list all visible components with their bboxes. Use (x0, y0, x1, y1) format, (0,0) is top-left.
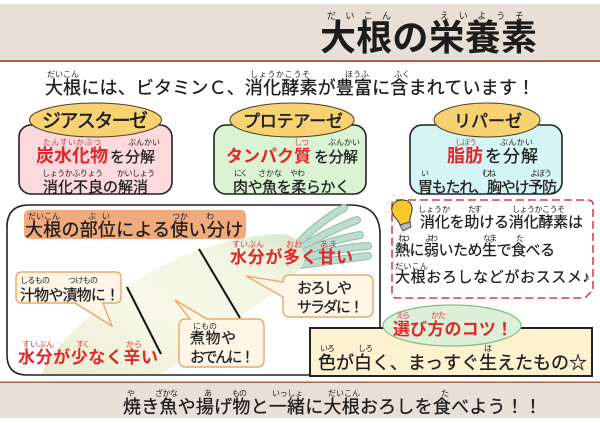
panel: リパーゼ: むね (482, 169, 496, 178)
panel: ジアスターゼ: ジアスターゼ (42, 110, 148, 132)
text: tip lines: よわ (425, 234, 438, 243)
panel: how to choose: いろ (320, 344, 335, 353)
panel: リパーゼ: リパーゼ (454, 112, 522, 131)
title: えいようそ (440, 11, 524, 21)
text: tip lines: ねつ (398, 234, 410, 243)
panel: プロテアーゼ: やわ (290, 169, 305, 178)
panel: ジアスターゼ: を分解 (110, 149, 155, 166)
text: tip lines: た (516, 234, 524, 243)
panel: how to choose (310, 305, 592, 376)
callout: soups and pickles: つけもの (68, 276, 98, 285)
panel: how to choose: 選び方のコツ！ (393, 319, 513, 339)
intro sentence: ほうふ (345, 70, 369, 79)
intro sentence: 大根には、ビタミンＣ、消化酵素が豊富に含まれています！ (45, 78, 535, 98)
intro sentence: ふく (394, 70, 410, 79)
heading: parts (24, 210, 246, 240)
heading: parts: だいこん (28, 212, 60, 221)
label: less water and spicy: すいぶん (22, 340, 54, 349)
callout: simmered dishes (175, 300, 264, 367)
text: tip lines: 消化を助ける消化酵素は (420, 214, 583, 231)
footer message: いっしょ (272, 389, 303, 398)
text: tip lines: しょうか (418, 205, 450, 214)
panel: プロテアーゼ: しつ (294, 138, 309, 147)
panel: プロテアーゼ: タンパク質 (226, 147, 311, 166)
panel: ジアスターゼ (19, 103, 172, 196)
callout: simmered dishes: にもの (193, 322, 217, 331)
callout: simmered dishes: おでんに！ (190, 349, 255, 366)
callout: grated and salad: おろしや (297, 280, 352, 297)
title: だいこん (327, 11, 391, 21)
panel: ジアスターゼ: 炭水化物 (36, 146, 108, 166)
panel: ジアスターゼ: ぶんかい (128, 138, 160, 147)
header band (0, 4, 600, 62)
intro sentence: だいこん (47, 70, 79, 79)
callout: grated and salad (246, 275, 373, 317)
panel: リパーゼ: しぼう (455, 138, 477, 147)
panel: parts of the daikon (7, 205, 380, 375)
footer message: ざかな (155, 388, 178, 398)
intro sentence: しょうかこうそ (250, 70, 310, 79)
callout: grated and salad: サラダに！ (297, 299, 364, 316)
label: more water and sweet: すいぶん (232, 240, 264, 249)
panel: how to choose: は (484, 344, 492, 353)
callout: simmered dishes: 煮物や (190, 330, 236, 347)
footer message: 焼き魚や揚げ物と一緒に大根おろしを食べよう！！ (123, 397, 542, 417)
panel: リパーゼ: ぶんかい (500, 138, 533, 147)
divider lines (127, 249, 240, 354)
text: tip lines: 熱に弱いため生で食べる (395, 242, 555, 259)
panel: ジアスターゼ: 消化不良の解消 (43, 179, 148, 196)
footer message: や (127, 389, 135, 398)
callout: soups and pickles: しるもの (20, 276, 50, 285)
panel: プロテアーゼ: 肉や魚を柔らかく (233, 179, 350, 196)
label: less water and spicy: から (126, 340, 142, 349)
panel: リパーゼ: よぼう (530, 169, 552, 178)
illustration: daikon (42, 208, 368, 374)
footer message: だいこん (328, 389, 360, 398)
panel: リパーゼ: 胃もたれ、胸やけ予防 (418, 179, 557, 196)
heading: parts: 大根の部位による使い分け (25, 220, 243, 240)
panel: ジアスターゼ: しょうかふりょう (42, 169, 103, 178)
footer message: た (441, 389, 449, 398)
footer message: もの (232, 389, 247, 398)
heading: parts: ぶ い (88, 212, 110, 221)
text: tip lines: たす (468, 205, 482, 214)
panel: リパーゼ (410, 103, 562, 196)
text: tip lines: なま (483, 234, 497, 243)
panel: how to choose: しろ (358, 344, 373, 353)
footer message (123, 388, 542, 417)
label: less water and spicy: 水分が少なく辛い (18, 347, 158, 367)
text: tip lines: 大根おろしなどがおススメ♪ (395, 269, 590, 286)
panel: ジアスターゼ: たんすいかぶつ (43, 138, 101, 147)
panel: how to choose: えら (396, 311, 410, 320)
text: tip lines: だいこん (395, 262, 428, 271)
panel: how to choose: かた (431, 311, 446, 320)
callout: soups and pickles: 汁物や漬物に！ (20, 287, 120, 304)
callout: soups and pickles (16, 272, 121, 326)
panel: プロテアーゼ: プロテアーゼ (243, 112, 343, 131)
panel: digestive enzyme tip (385, 192, 593, 298)
footer band (0, 382, 600, 418)
text: tip lines (395, 205, 590, 286)
panel: プロテアーゼ (214, 103, 366, 196)
label: more water and sweet: おお (286, 240, 302, 249)
panel: ジアスターゼ: かいしょう (117, 169, 155, 178)
panel: プロテアーゼ: にく (234, 169, 248, 178)
heading: parts: わ (206, 212, 214, 221)
icon: light bulb (385, 192, 412, 231)
panel: リパーゼ: 脂肪 (447, 146, 483, 166)
label: less water and spicy: すく (76, 340, 90, 349)
panel: how to choose: 色が白く、まっすぐ生えたもの☆ (318, 353, 587, 373)
panel: プロテアーゼ: を分解 (314, 149, 358, 166)
heading: parts: つか (172, 212, 188, 221)
title: 大根の栄養素 (320, 17, 537, 58)
panel: リパーゼ: い (421, 169, 429, 178)
footer message: あ (204, 389, 212, 398)
panel: プロテアーゼ: さかな (258, 169, 282, 178)
label: more water and sweet: あま (320, 240, 337, 249)
panel: リパーゼ: を分解 (485, 147, 538, 166)
panel: プロテアーゼ: ぶんかい (328, 138, 360, 147)
text: tip lines: しょうかこうそ (512, 205, 565, 214)
label: more water and sweet: 水分が多く甘い (230, 247, 353, 267)
